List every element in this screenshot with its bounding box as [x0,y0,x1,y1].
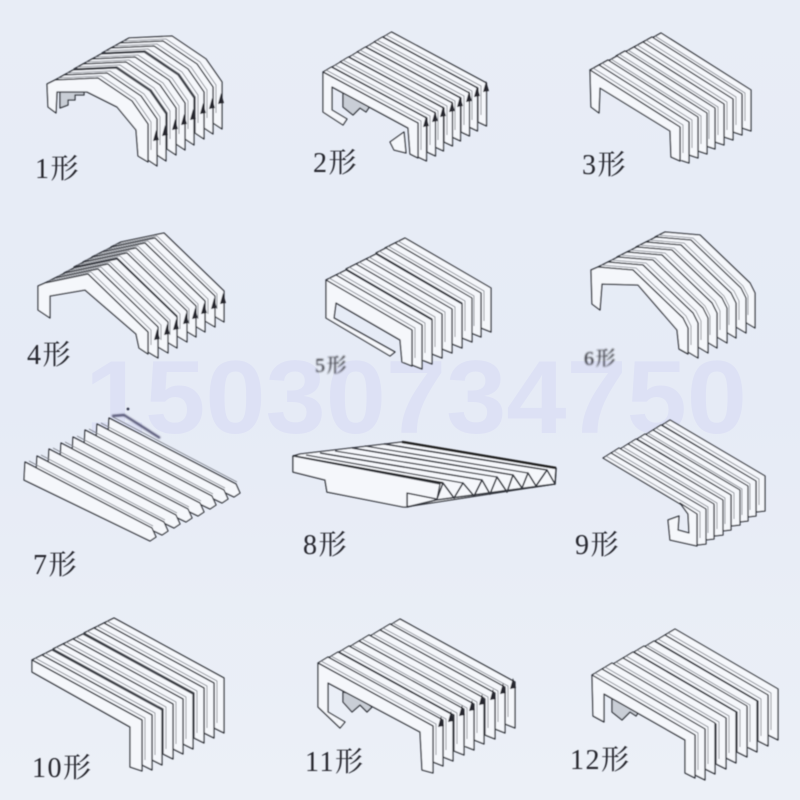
pleat tops [293,442,556,507]
label: 10: 10形 [32,753,93,784]
figure 3: flat top with leg [590,33,751,163]
figure 9: bellows with L foot [603,420,765,546]
label: 12: 12形 [570,745,631,776]
label: 8: 8形 [303,530,348,561]
figure 7: flat zigzag bellows [24,408,240,541]
figure 4: peaked bellows [38,233,226,358]
label: 2: 2形 [313,148,358,179]
label: 5 (illegible in source): 5形 [315,354,348,377]
figure 2: rectangular bellows with feet [323,32,489,161]
watermark phone number: 15030734750 [85,340,747,456]
label: 3: 3形 [582,150,627,181]
figure 8: flat bellows with stepped flange [293,442,556,507]
figure 5: rectangular box bellows [326,238,491,369]
label: 6 (illegible in source): 6形 [584,347,617,370]
figure 10: bellows with single long leg [32,618,224,771]
label: 4: 4形 [27,340,72,371]
figure 12: bellows with wide legs [592,629,778,780]
label: 11: 11形 [305,747,364,778]
figure 1: arched bellows [47,36,224,166]
figure 6: peaked bellows with legs [591,232,755,358]
label: 7: 7形 [33,550,78,581]
figure 11: bellows with stepped end [318,619,516,773]
label: 9: 9形 [575,530,620,561]
label: 1: 1形 [35,154,80,185]
